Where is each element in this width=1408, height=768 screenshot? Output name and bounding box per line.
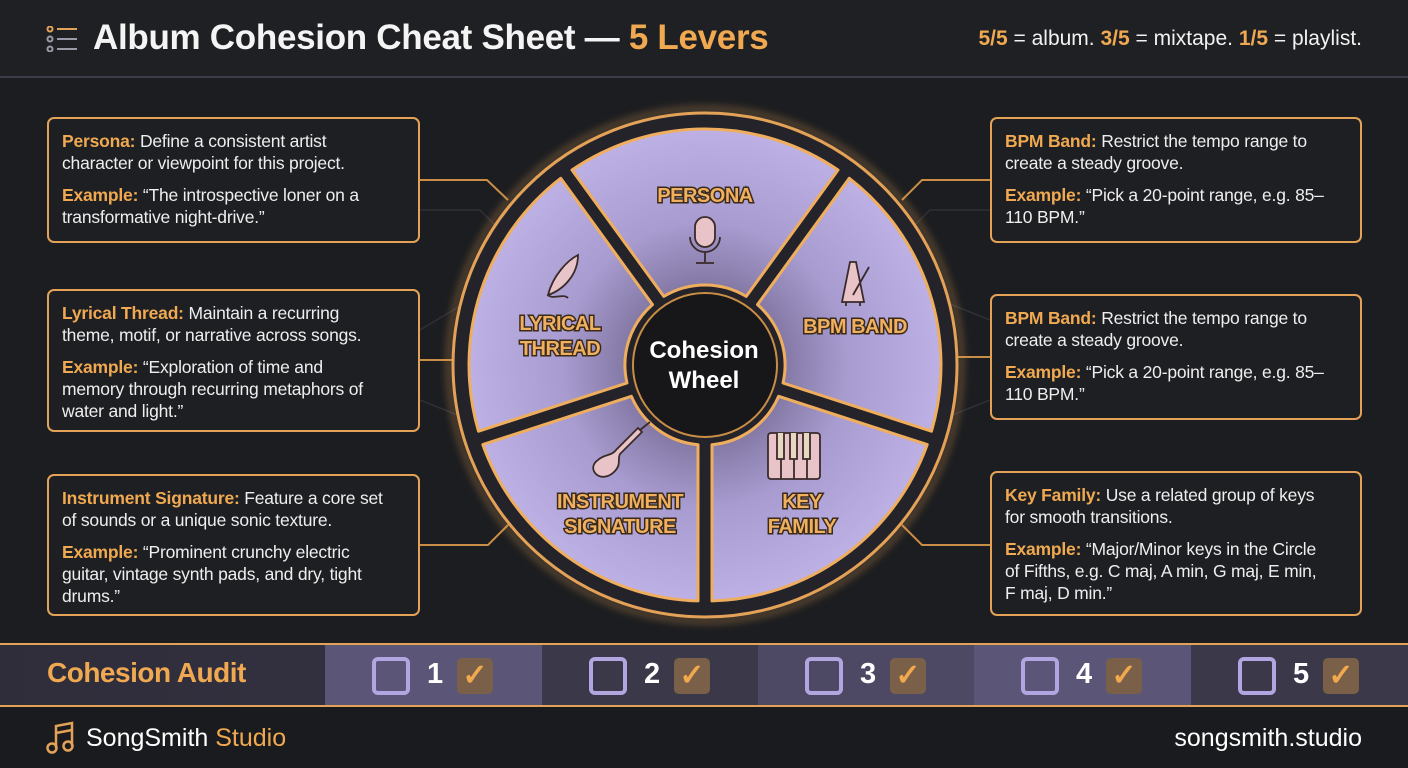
audit item 5: ✓ [1328, 659, 1354, 692]
audit item 3 [758, 645, 975, 705]
wheel labels: SIGNATURE [564, 516, 676, 538]
panel: persona [47, 117, 420, 243]
title: Album Cohesion Cheat Sheet — 5 Levers [93, 18, 768, 57]
wheel labels: BPM BAND [803, 316, 907, 338]
footer [0, 707, 1408, 768]
hub text: Wheel [669, 367, 739, 394]
wheel labels: FAMILY [768, 516, 837, 538]
hub text: Cohesion [649, 337, 759, 364]
panel: instrument signature: Example: “Prominent crunchy electric guitar, vintage synth pads, and dry, tight drums.” [62, 542, 362, 606]
panel: bpm band: BPM Band: Restrict the tempo range to create a steady groove. [1005, 131, 1307, 173]
audit item 2: 2 [644, 658, 660, 690]
panel: bpm band [990, 117, 1362, 243]
wheel labels: KEY [782, 491, 823, 513]
audit item 5 [1191, 645, 1408, 705]
panel: persona: Example: “The introspective loner on a transformative night-drive.” [62, 185, 359, 227]
panel: lyrical thread [47, 289, 420, 432]
audit item 1: ✓ [462, 659, 488, 692]
panel: bpm band: Example: “Pick a 20-point range, e.g. 85–110 BPM.” [1005, 185, 1324, 227]
audit item 3: 3 [860, 658, 876, 690]
panel: key family [990, 471, 1362, 616]
audit item 4: ✓ [1111, 659, 1137, 692]
audit item 1: 1 [427, 658, 443, 690]
header bar [0, 0, 1408, 78]
wheel labels: PERSONA [657, 185, 753, 207]
wheel labels: LYRICAL [519, 313, 601, 335]
icons [548, 217, 869, 479]
audit label: Cohesion Audit [47, 657, 246, 688]
brand: SongSmith Studio [86, 724, 286, 752]
audit item 2 [542, 645, 759, 705]
panel: bpm band 2 [990, 294, 1362, 420]
panel: key family: Key Family: Use a related group of keys for smooth transitions. [1005, 485, 1314, 527]
panel: persona: Persona: Define a consistent artist character or viewpoint for this project. [62, 131, 345, 173]
icon: music note [46, 722, 74, 754]
panel: key family: Example: “Major/Minor keys in the Circle of Fifths, e.g. C maj, A min, G maj, E min, F maj, D min.” [1005, 539, 1316, 603]
audit item 2: ✓ [679, 659, 705, 692]
panel: instrument signature [47, 474, 420, 616]
tagline: 5/5 = album. 3/5 = mixtape. 1/5 = playlist. [978, 27, 1362, 50]
audit item 5: 5 [1293, 658, 1309, 690]
cohesion audit bar [0, 643, 1408, 707]
icon: list [46, 26, 77, 52]
wheel labels [519, 185, 907, 538]
wheel labels: THREAD [520, 338, 600, 360]
audit item 4 [974, 645, 1191, 705]
audit item 1 [325, 645, 542, 705]
audit item 4: 4 [1076, 658, 1092, 690]
panel: instrument signature: Instrument Signature: Feature a core set of sounds or a unique sonic texture. [62, 488, 383, 530]
panel: lyrical thread: Example: “Exploration of time and memory through recurring metaphors of water and light.” [62, 357, 363, 421]
audit item 3: ✓ [895, 659, 921, 692]
hub text [649, 337, 759, 394]
panel: bpm band 2: BPM Band: Restrict the tempo range to create a steady groove. [1005, 308, 1307, 350]
panel: bpm band 2: Example: “Pick a 20-point range, e.g. 85–110 BPM.” [1005, 362, 1324, 404]
panel: lyrical thread: Lyrical Thread: Maintain a recurring theme, motif, or narrative across songs. [62, 303, 361, 345]
url: songsmith.studio [1174, 724, 1362, 752]
wheel labels: INSTRUMENT [557, 491, 683, 513]
